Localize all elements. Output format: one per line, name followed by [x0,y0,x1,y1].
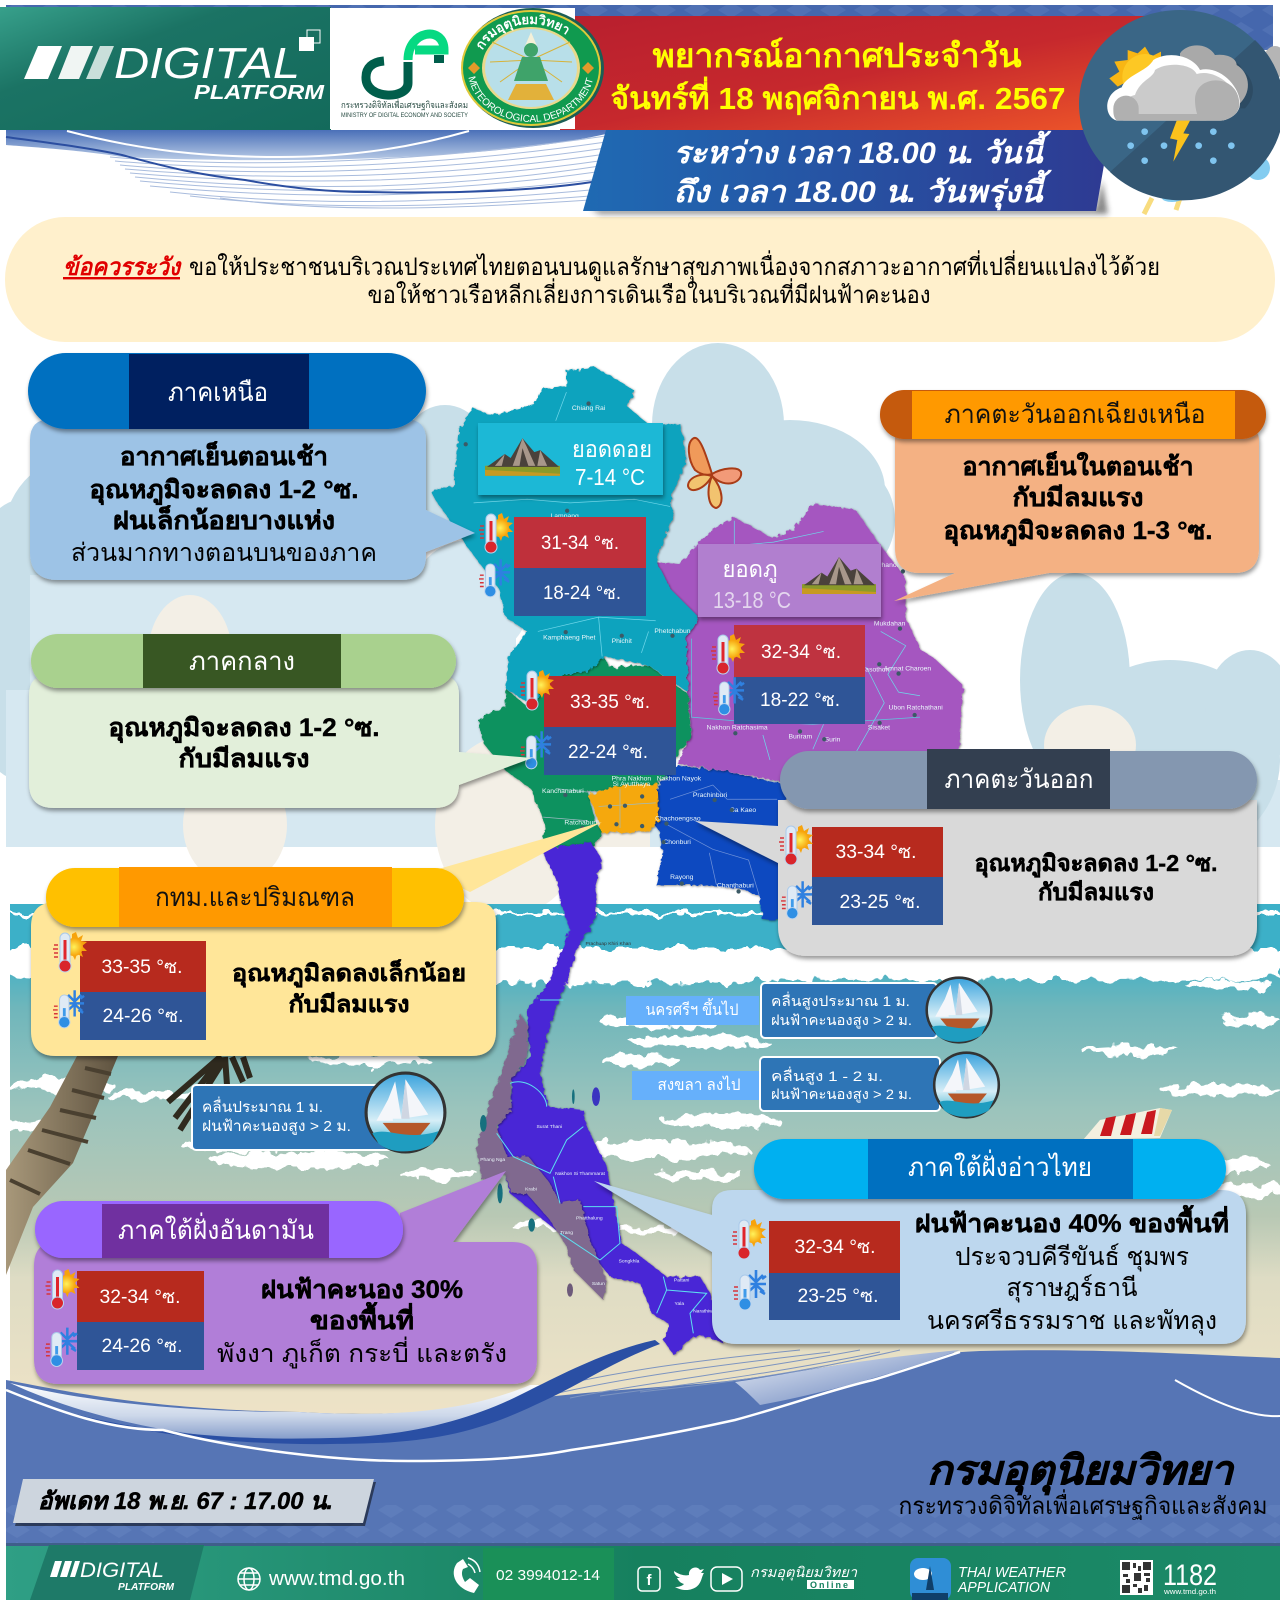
panel: Bangkok and vicinity [31,822,602,1056]
map: south province labels: Narathiwat [693,1308,718,1314]
panel: digital platform logo [0,7,331,130]
map: gulf south region [497,842,723,1355]
text: ยอดภู: ยอดภู [722,556,778,583]
footer: social media [638,1564,858,1591]
text: central forecast: อุณหภูมิจะลดลง 1-2 °ซ. [108,714,380,744]
callout: wave south of Songkhla: ฝนฟ้าคะนองสูง > 2 ม. [771,1086,912,1103]
map: south province labels: Nakhon Si Thammarat [555,1171,605,1177]
icon: hot thermometer [732,1219,766,1259]
map: south province labels: Phang Nga [480,1157,505,1163]
text: caution label: ข้อควรระวัง [63,254,182,281]
footer: website: www.tmd.go.th [268,1568,405,1590]
background: footer bar [6,1543,1280,1600]
text: caution line 2: ขอให้ชาวเรือหลีกเลี่ยงการเดินเรือในบริเวณที่มีฝนฟ้าคะนอง [368,278,930,309]
panel: central [29,634,532,808]
chart: east temperatures: 33-34 °ซ. [836,842,916,863]
heading: ภาคใต้ฝั่งอันดามัน: ภาคใต้ฝั่งอันดามัน [118,1212,314,1245]
icon: cold thermometer [713,677,744,715]
text: east forecast [974,850,1218,905]
icon: cold thermometer [479,559,510,597]
panel: caution banner [5,217,1275,342]
map: province labels: Nakhon Ratchasima [707,725,768,732]
map: province labels: Lampang [551,513,579,520]
map: province labels: Prachinburi [693,792,728,799]
icon: mountain [802,557,876,594]
map: province labels: Phetchaburi [566,859,602,866]
icon: cold thermometer [45,1328,77,1366]
heading: กทม.และปริมณฑล: กทม.และปริมณฑล [155,882,355,912]
background: palm tree [6,1056,250,1275]
map of Thailand southern peninsula [477,842,723,1355]
text: period start: ระหว่าง เวลา 18.00 น. วันนี้ [674,130,1052,170]
text: north forecast: อุณหภูมิจะลดลง 1-2 °ซ. [90,476,358,506]
map: east region [652,765,788,920]
map: province labels: Yasothon [861,666,890,673]
panel: south Andaman [34,1171,537,1384]
callout: wave south of Songkhla [632,1053,999,1117]
chart: Andaman temperatures [77,1271,204,1370]
panel: south gulf [594,1139,1246,1344]
label: update time [13,1479,376,1526]
map: province labels: Ubon Ratchathani [889,704,943,711]
map: province labels: Sisaket [868,725,890,732]
map: Bangkok region [588,783,659,833]
icon: stripes [24,46,114,79]
text: northeast forecast: อุณหภูมิจะลดลง 1-3 °ซ. [944,517,1212,547]
panel: Doi peak temperature [478,423,663,495]
icon: mountain [485,438,560,476]
text: north forecast [71,441,377,567]
background: beach ball decoration [1083,1108,1172,1140]
chart: Andaman temperatures: 24-26 °ซ. [102,1336,182,1357]
footer: social media: กรมอุตุนิยมวิทยา [750,1564,858,1581]
panel: north map temperatures [479,513,646,616]
map: province lines [474,392,920,896]
icon: hot thermometer [711,634,745,674]
map: province labels: Amnat Charoen [884,666,931,673]
map: province labels [542,405,943,889]
icon: hot thermometer [479,513,513,553]
map: south province labels: Krabi [525,1186,537,1192]
text: ministry name: กระทรวงดิจิทัลเพื่อเศรษฐกิจและสังคม [898,1489,1268,1520]
background: top pattern band [6,5,1273,50]
map: south province labels: Songkhla [619,1259,640,1265]
map: south province labels: Pattani [674,1278,689,1284]
text: east forecast: กับมีลมแรง [1038,879,1154,905]
map: province labels: Kanchanaburi [542,788,584,795]
panel: Phu peak temperature [698,544,881,617]
text: PLATFORM: PLATFORM [194,82,326,104]
text: south gulf forecast: นครศรีธรรมราช และพัทลุง [927,1307,1217,1336]
icon: ship [934,1053,999,1117]
footer: weather app: APPLICATION [957,1579,1050,1596]
text: ministry name: กระทรวงดิจิทัลเพื่อเศรษฐกิจและสังคม [341,98,468,111]
text: ministry english: MINISTRY OF DIGITAL ECONOMY AND SOCIETY [341,113,468,119]
chart: east temperatures: 23-25 °ซ. [840,892,920,913]
text: south gulf forecast [915,1204,1229,1336]
text: Bangkok forecast [232,958,466,1017]
text: east forecast: อุณหภูมิจะลดลง 1-2 °ซ. [974,850,1218,878]
text: department name: กรมอุตุนิยมวิทยา [927,1449,1235,1496]
icon: squares [299,30,320,51]
text: hot range: 31-34 °ซ. [541,533,619,554]
chart: Andaman temperatures: 32-34 °ซ. [100,1287,180,1308]
map: province labels: Chonburi [663,839,691,846]
map: province labels: Chiang Rai [572,405,606,412]
map: south province labels: Prachuap Khiri Khan [585,941,631,947]
callout: Andaman waves: คลื่นประมาณ 1 ม. [202,1096,323,1116]
title: date: จันทร์ที่ 18 พฤศจิกายน พ.ศ. 2567 [610,76,1066,116]
map: province labels: Phanom [877,562,903,569]
footer: digital platform logo: PLATFORM [118,1582,175,1593]
map: province labels: Nakhon Nayok [657,775,702,782]
callout: wave south of Songkhla: คลื่นสูง 1 - 2 ม. [771,1067,883,1085]
text: period end: ถึง เวลา 18.00 น. วันพรุ่งนี้ [674,169,1052,211]
chart: Bangkok temperatures: 33-35 °ซ. [102,957,182,978]
text: south gulf forecast: ฝนฟ้าคะนอง 40% ของพื้นที่ [915,1204,1229,1238]
chart: Bangkok temperatures [80,941,206,1040]
icon: hot thermometer [520,670,554,710]
text: south gulf forecast: สุราษฎร์ธานี [1006,1274,1138,1303]
icon: hot thermometer [46,1269,80,1309]
callout: Andaman waves [192,1073,445,1152]
icon: meteorological department seal: METEOROLOGICAL DEPARTMENT [468,76,592,122]
text: central forecast: กับมีลมแรง [178,745,310,773]
text: Andaman forecast [217,1276,507,1369]
icon: meteorological department seal: กรมอุตุนิยมวิทยา [477,14,569,50]
text: northeast forecast [944,451,1212,547]
text: 7-14 C: 7-14 °C [575,464,645,490]
callout: wave north of Nakhon Si Thammarat: ฝนฟ้าคะนองสูง > 2 ม. [771,1012,912,1029]
map of Thailand upper regions [431,367,963,920]
map: province labels: Chanthaburi [717,882,754,889]
text: Andaman forecast: พังงา ภูเก็ต กระบี่ และตรัง [217,1336,507,1369]
text: central forecast [108,714,380,773]
text: cold range: 18-24 °ซ. [543,583,621,604]
text: ยอดดอย: ยอดดอย [572,436,652,462]
heading: ภาคใต้ฝั่งอ่าวไทย: ภาคใต้ฝั่งอ่าวไทย [908,1149,1092,1182]
footer: weather app [910,1558,1066,1600]
icon: cold thermometer [520,731,551,769]
text: northeast forecast: กับมีลมแรง [1012,484,1144,512]
map: province labels: Si Ayutthaya [613,781,650,788]
callout: wave north of Nakhon Si Thammarat: นครศรีฯ ขึ้นไป [646,998,738,1019]
text: hot range: 32-34 °ซ. [761,642,841,663]
panel: northeast map temperatures [711,625,865,724]
heading: ภาคตะวันออก: ภาคตะวันออก [944,764,1094,794]
panel: title banner [560,16,1180,130]
panel: northeast [880,390,1266,601]
chart: south gulf temperatures [769,1221,900,1320]
map: south province labels: Phatthalung [576,1215,603,1221]
panel: east [695,749,1257,956]
map: northeast region [654,503,963,781]
icon: cold thermometer [781,881,812,919]
panel: period banner [583,130,1110,214]
map: province labels: Surin [825,736,841,743]
footer: QR code and hotline [1120,1559,1217,1596]
chart: south gulf temperatures: 23-25 °ซ. [798,1286,878,1307]
text: Bangkok forecast: อุณหภูมิลดลงเล็กน้อย [232,958,466,988]
map: south province labels: Trang [560,1230,573,1236]
map: province labels: Mukdahan [874,620,906,627]
map: province dots [464,401,917,894]
text: cold range: 22-24 °ซ. [568,742,648,763]
map: south province labels: Satun [592,1281,605,1287]
text: hot range: 33-35 °ซ. [570,692,650,713]
text: Andaman forecast: ฝนฟ้าคะนอง 30% [261,1276,463,1304]
icon: ship [927,978,991,1042]
heading: ภาคเหนือ: ภาคเหนือ [168,377,268,407]
map: south province labels: Surat Thani [536,1124,562,1130]
label: update time: อัพเดท 18 พ.ย. 67 : 17.00 น. [38,1488,333,1515]
text: north forecast: อากาศเย็นตอนเช้า [120,441,328,471]
map: province labels: Kamphaeng Phet [543,635,596,642]
icon: meteorological department seal [461,8,604,128]
footer: digital platform logo [30,1545,204,1600]
chart: Bangkok temperatures: 24-26 °ซ. [102,1006,184,1027]
panel: north [28,353,475,580]
text: Andaman forecast: ของพื้นที่ [310,1301,414,1335]
map: province labels: Rayong [670,874,694,881]
footer: phone [454,1548,614,1600]
text: north forecast: ส่วนมากทางตอนบนของภาค [71,539,377,567]
background: sky and clouds [0,343,1280,915]
map: province labels: Phra Nakhon [612,776,651,783]
map: province labels: Ratchaburi [564,820,598,827]
text: DIGITAL: DIGITAL [114,39,300,88]
map: north region [431,367,699,706]
text: south gulf forecast: ประจวบคีรีขันธ์ ชุมพร [955,1243,1189,1272]
chart: south gulf temperatures: 32-34 °ซ. [794,1237,876,1258]
text: caution line 1: ขอให้ประชาชนบริเวณประเทศไทยตอนบนดูแลรักษาสุขภาพเนื่องจากสภาวะอากาศที่เปลี่ยนแปลงไว้ด้วย [189,250,1160,282]
background: bottom wave [6,1340,1280,1546]
title: daily forecast: พยากรณ์อากาศประจำวัน [652,37,1022,74]
footer: social media: Online [810,1580,850,1590]
footer: social media: f [646,1572,652,1589]
background: top wave swoosh [6,130,606,208]
footer: QR code and hotline: 1182 [1163,1559,1217,1592]
icon: cold thermometer [53,990,84,1028]
map: andaman region [477,1013,607,1300]
heading: ภาคตะวันออกเฉียงเหนือ: ภาคตะวันออกเฉียงเหนือ [944,399,1206,429]
map: province labels: Chachoengsao [655,815,701,822]
footer: phone: 02 3994012-14 [496,1567,600,1584]
heading: ภาคกลาง: ภาคกลาง [189,646,295,676]
map: province labels: Phetchabun [654,628,691,635]
text: northeast forecast: อากาศเย็นในตอนเช้า [962,451,1194,481]
footer: digital platform logo: DIGITAL [80,1559,164,1582]
map: province labels: Phichit [612,638,632,645]
callout: wave north of Nakhon Si Thammarat [626,978,991,1042]
map: south province lines [497,1000,707,1333]
map: south province labels [480,941,718,1314]
icon: cold thermometer [733,1270,766,1310]
map: south province labels: Yala [675,1301,684,1307]
footer: QR code and hotline: www.tmd.go.th [1163,1589,1216,1596]
map: central region [479,655,691,849]
text: Bangkok forecast: กับมีลมแรง [288,991,410,1017]
icon: ship [366,1073,445,1152]
callout: Andaman waves: ฝนฟ้าคะนองสูง > 2 ม. [202,1118,351,1135]
icon: butterfly [688,438,741,508]
text: north forecast: ฝนเล็กน้อยบางแห่ง [113,505,335,535]
map: province labels: Buriram [789,734,813,741]
text: 13-18 C: 13-18 °C [713,587,791,613]
map: islands [480,1087,600,1297]
text: cold range: 18-22 °ซ. [760,690,840,711]
panel: ministry logo [330,8,575,129]
callout: wave north of Nakhon Si Thammarat: คลื่นสูงประมาณ 1 ม. [771,992,910,1010]
icon: hot thermometer [53,932,87,972]
icon: storm weather badge [1079,10,1280,214]
chart: east temperatures [812,827,943,925]
callout: wave south of Songkhla: สงขลา ลงไป [658,1075,740,1094]
map: province labels: Sa Kaeo [730,807,756,814]
footer: weather app: THAI WEATHER [958,1564,1066,1581]
icon: hot thermometer [779,825,813,865]
panel: central map temperatures [520,670,676,775]
background: sea and sand [0,904,1280,1424]
icon: DE logo [366,34,444,95]
